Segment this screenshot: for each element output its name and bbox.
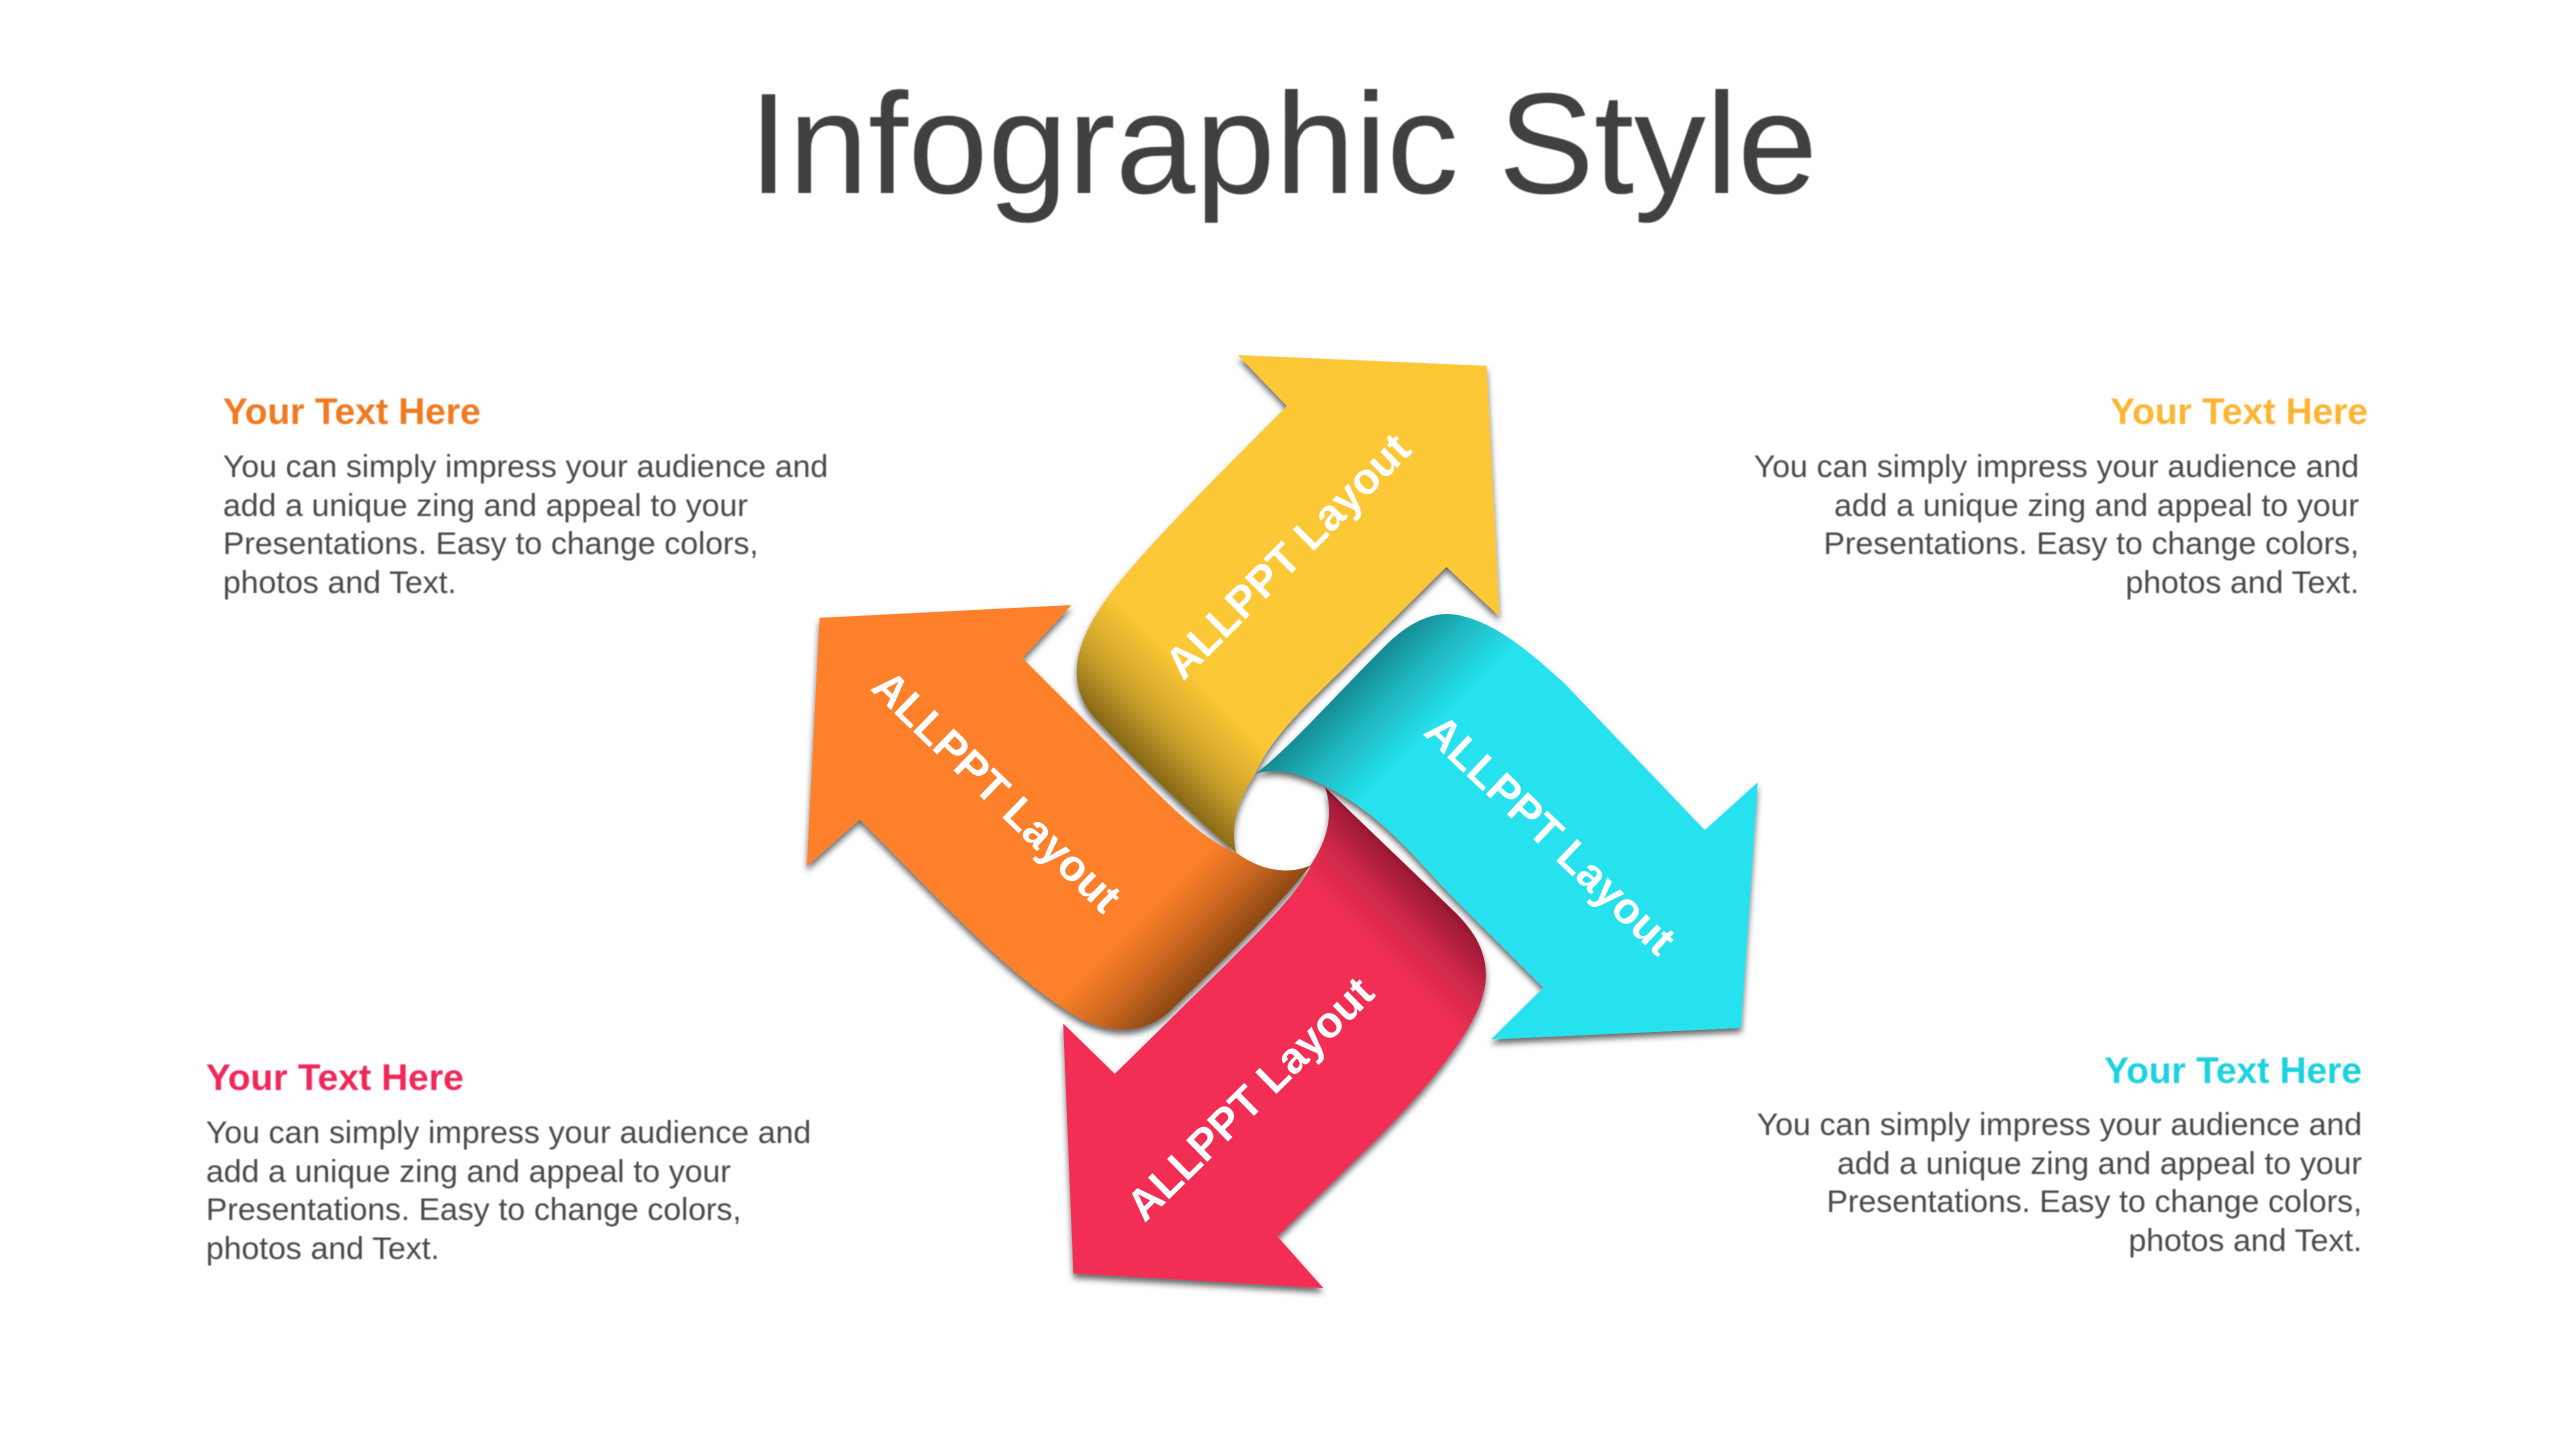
arrow: yellow xyxy=(1077,355,1499,853)
body text: bottom right: photos and Text. xyxy=(2129,1222,2362,1258)
heading: top right: Your Text Here xyxy=(2110,391,2368,432)
heading: bottom right: Your Text Here xyxy=(2104,1050,2362,1091)
arrow: cyan xyxy=(1255,614,1758,1039)
body text: top right xyxy=(1754,448,2360,600)
arrow: red xyxy=(1063,787,1486,1288)
panel: bottom right text xyxy=(1757,1050,2362,1258)
body text: top left: You can simply impress your audience and xyxy=(223,448,828,484)
body text: top right: add a unique zing and appeal to your xyxy=(1834,486,2359,522)
body text: bottom left: Presentations. Easy to change colors, xyxy=(206,1191,741,1227)
red arrow label: ALLPPT Layout xyxy=(1117,967,1384,1231)
red arrow shape xyxy=(1063,787,1486,1288)
body text: bottom right: You can simply impress your audience and xyxy=(1757,1106,2362,1142)
title: Infographic Style xyxy=(749,64,1817,224)
body text: top right: You can simply impress your audience and xyxy=(1754,448,2359,484)
panel: bottom left text xyxy=(206,1057,811,1266)
yellow arrow label: ALLPPT Layout xyxy=(1156,424,1421,689)
heading: top left: Your Text Here xyxy=(223,391,481,432)
body text: top right: photos and Text. xyxy=(2126,564,2359,600)
yellow arrow shape xyxy=(1077,355,1499,853)
body text: bottom right xyxy=(1757,1106,2362,1258)
orange arrow shape xyxy=(807,605,1311,1030)
body text: top left xyxy=(223,448,828,600)
cyan arrow shape xyxy=(1255,614,1758,1039)
body text: top left: photos and Text. xyxy=(223,564,456,600)
body text: top left: Presentations. Easy to change colors, xyxy=(223,525,758,561)
heading: bottom left: Your Text Here xyxy=(206,1057,464,1098)
orange arrow label: ALLPPT Layout xyxy=(862,661,1131,923)
body text: bottom right: add a unique zing and appeal to your xyxy=(1837,1144,2362,1180)
pinwheel arrow diagram xyxy=(802,355,1762,1297)
body text: bottom right: Presentations. Easy to change colors, xyxy=(1827,1183,2362,1219)
arrow: orange xyxy=(807,605,1311,1030)
body text: top left: add a unique zing and appeal to your xyxy=(223,486,748,522)
body text: bottom left xyxy=(206,1114,811,1266)
body text: bottom left: photos and Text. xyxy=(206,1230,439,1266)
body text: bottom left: You can simply impress your audience and xyxy=(206,1114,811,1150)
panel: top right text xyxy=(1754,391,2368,600)
panel: top left text xyxy=(223,391,828,600)
cyan arrow label: ALLPPT Layout xyxy=(1415,705,1685,965)
body text: bottom left: add a unique zing and appeal to your xyxy=(206,1152,731,1188)
body text: top right: Presentations. Easy to change colors, xyxy=(1824,525,2359,561)
